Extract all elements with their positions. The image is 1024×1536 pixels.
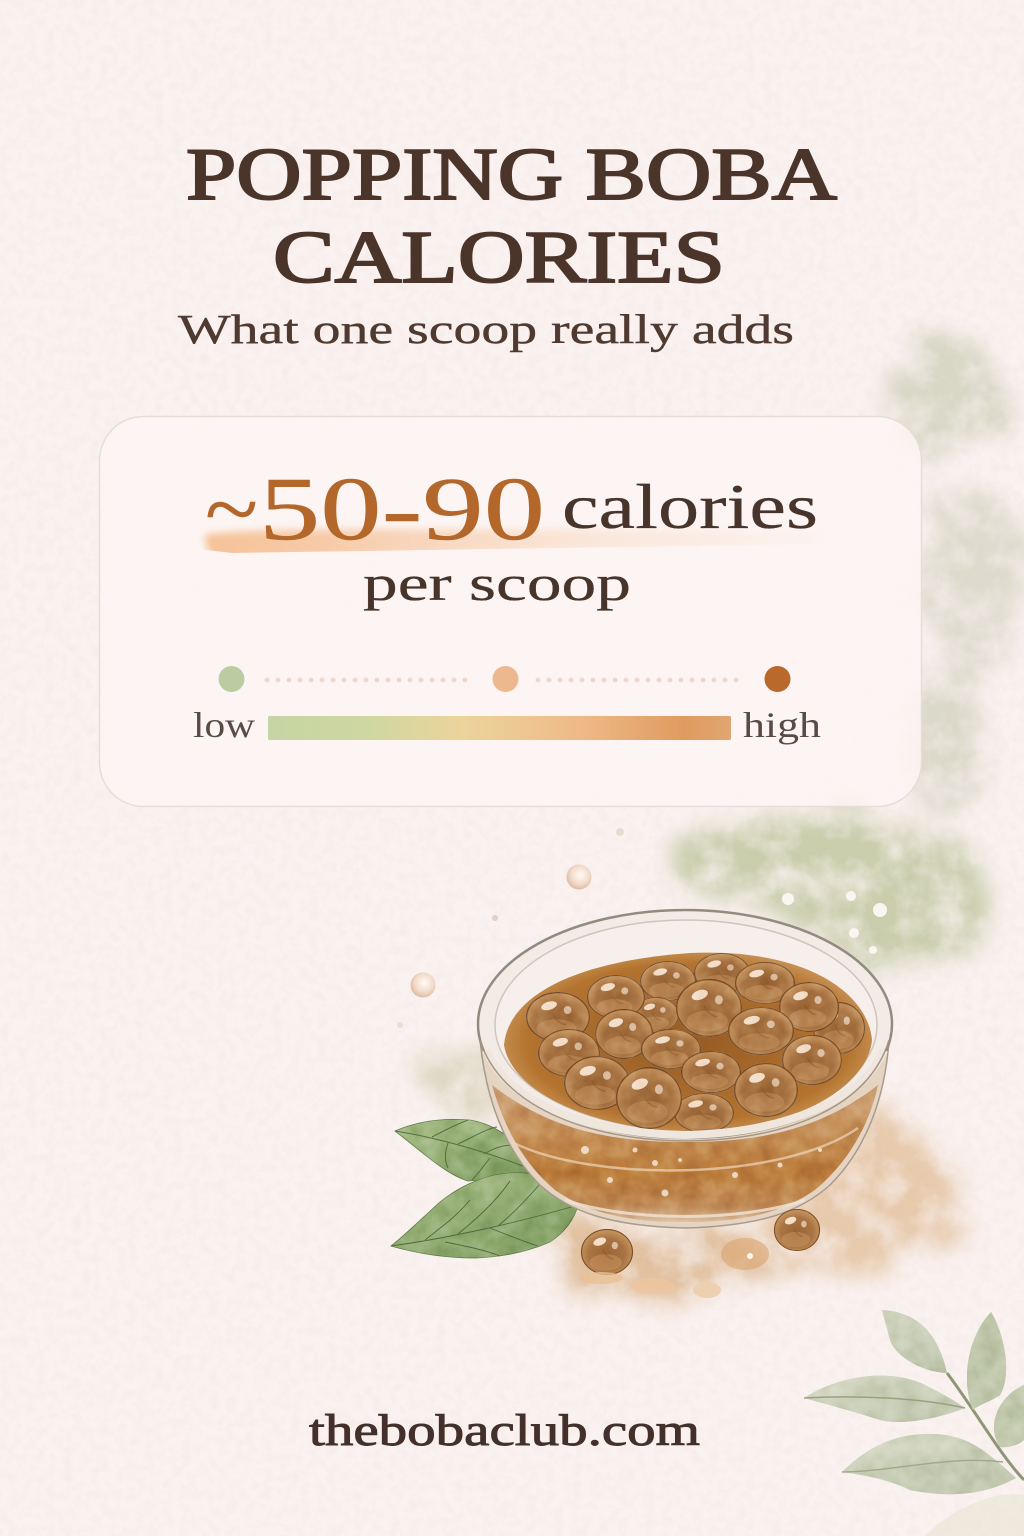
gradient bar [268,716,731,740]
panel: calorie estimate [100,416,922,806]
calorie range [205,460,545,559]
front rim [486,1050,884,1135]
per scoop label: per scoop [363,555,631,611]
boba pearls [526,953,865,1133]
title [186,134,837,299]
icon: upper mint leaf [395,1119,552,1181]
calorie range: 50-90 [259,460,545,559]
subtitle: What one scoop really adds [178,306,794,352]
decorative leaf branch: bottom right [804,1310,1024,1536]
leaf D [842,1434,1016,1494]
website footer: thebobaclub.com [309,1406,700,1455]
calories label: calories [562,471,818,542]
bowl body [480,1040,889,1228]
watercolor wash: behind the bowl [420,811,975,1296]
syrup surface [504,953,872,1132]
leaf E [994,1385,1024,1447]
highlight brush stroke [200,524,786,553]
icon: lower mint leaf [391,1173,578,1258]
lower wash [925,1494,1024,1536]
illustration: bowl of popping boba with leaves [391,910,892,1298]
title: CALORIES [273,217,725,299]
leaf A [882,1310,947,1373]
icon: glass bowl [478,910,892,1228]
high label: high [743,705,821,745]
dotted scale with markers [218,666,790,692]
bubbles inside the body [581,1146,822,1196]
calorie range: ~ [205,460,258,559]
watercolor wash: upper right [880,335,1024,818]
bowl mouth [478,910,892,1138]
leaf C [804,1376,965,1422]
icon: loose pearls on the table [579,1209,820,1298]
leaf B [967,1312,1006,1410]
floating pearls and droplets [397,828,887,1028]
low label: low [193,705,255,745]
title: POPPING BOBA [186,134,837,216]
